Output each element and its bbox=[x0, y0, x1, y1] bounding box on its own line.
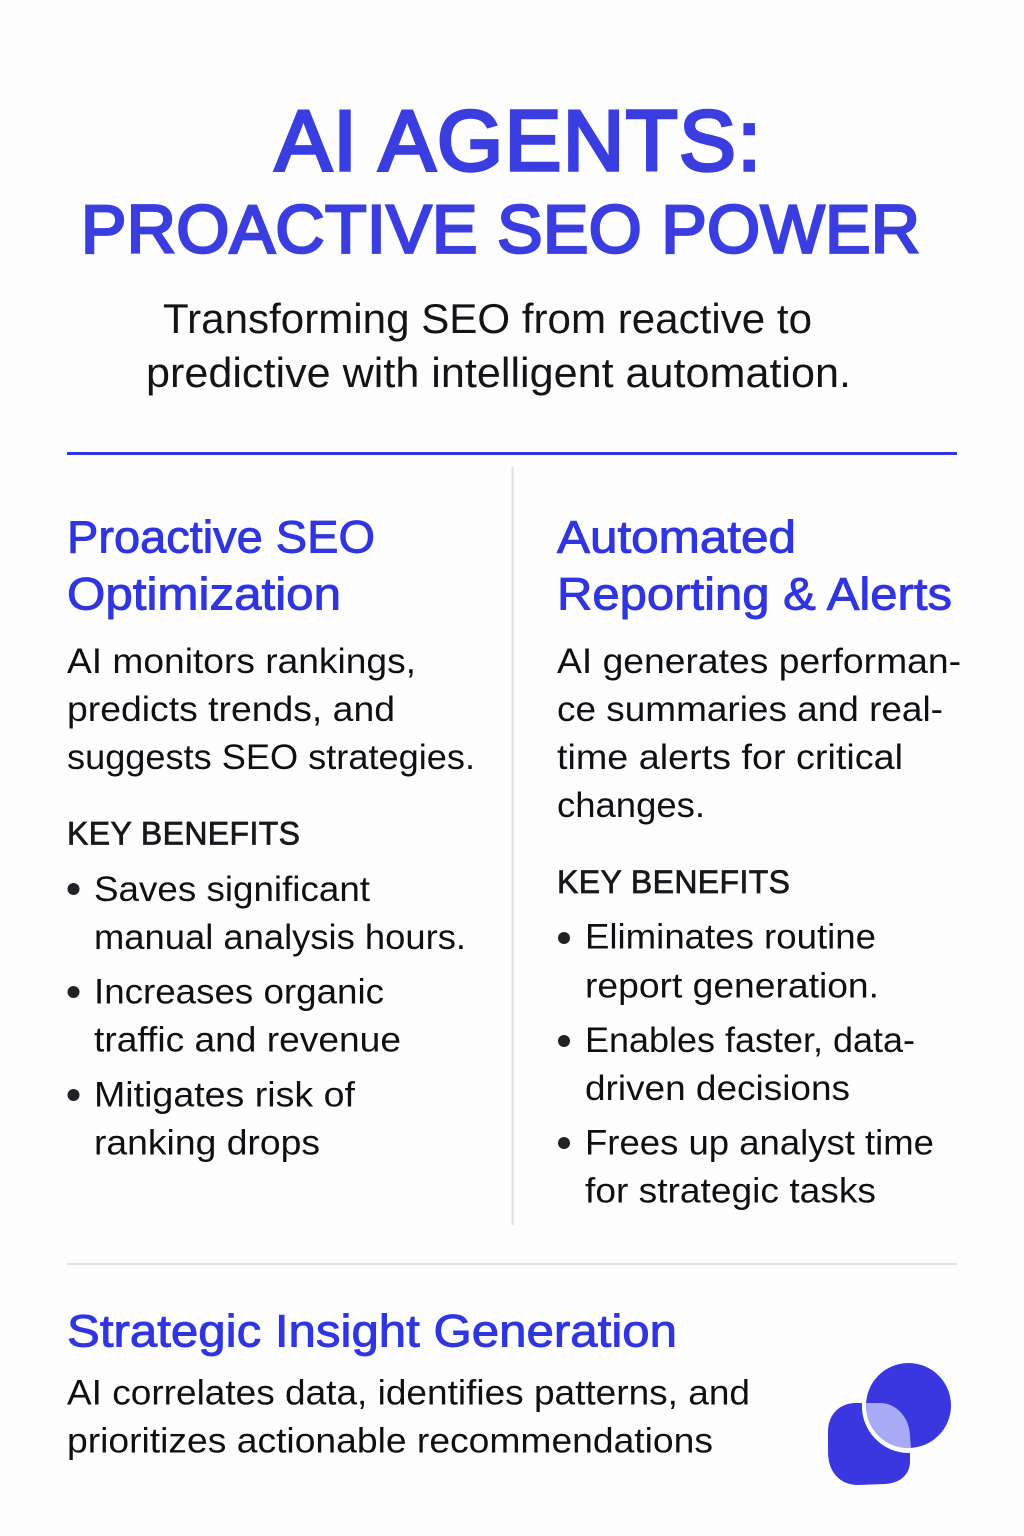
heading: strategic insight generation: Strategic Insight Generation bbox=[67, 1306, 677, 1356]
panel: strategic insight generation bbox=[67, 1306, 750, 1460]
heading: proactive seo optimization: Proactive SEO bbox=[67, 512, 375, 562]
benefits list: manual analysis hours. bbox=[94, 918, 466, 957]
benefits list: Enables faster, data- bbox=[585, 1021, 915, 1060]
description: changes. bbox=[557, 786, 705, 825]
benefits list: report generation. bbox=[585, 966, 879, 1006]
heading: automated reporting and alerts: Automated bbox=[557, 512, 796, 562]
description bbox=[557, 642, 961, 825]
heading: proactive seo optimization: Optimization bbox=[67, 568, 341, 620]
subtitle: predictive with intelligent automation. bbox=[146, 349, 851, 396]
title: AI AGENTS: bbox=[275, 94, 761, 189]
benefits list: for strategic tasks bbox=[585, 1172, 876, 1210]
benefits list: driven decisions bbox=[585, 1069, 850, 1108]
benefits list: ranking drops bbox=[94, 1124, 320, 1162]
benefits list: Saves significant bbox=[94, 870, 370, 909]
description: time alerts for critical bbox=[557, 738, 903, 777]
benefits list: Increases organic bbox=[94, 972, 384, 1012]
subtitle: Transforming SEO from reactive to bbox=[163, 295, 812, 342]
heading: proactive seo optimization bbox=[67, 512, 375, 620]
title: PROACTIVE SEO POWER bbox=[81, 192, 920, 268]
benefits list: traffic and revenue bbox=[94, 1020, 401, 1060]
heading: automated reporting and alerts: Reporting & Alerts bbox=[557, 568, 952, 620]
benefits list: Eliminates routine bbox=[585, 918, 876, 956]
key benefits heading: KEY BENEFITS bbox=[557, 864, 790, 900]
benefits list: Frees up analyst time bbox=[585, 1124, 934, 1162]
key benefits heading: KEY BENEFITS bbox=[67, 816, 300, 852]
heading: automated reporting and alerts bbox=[557, 512, 952, 620]
description: suggests SEO strategies. bbox=[67, 738, 475, 777]
panel: proactive seo optimization bbox=[67, 512, 475, 1162]
description: ce summaries and real- bbox=[557, 690, 943, 729]
benefits list: Mitigates risk of bbox=[94, 1076, 355, 1114]
description bbox=[67, 1374, 750, 1460]
benefits list bbox=[68, 870, 466, 1162]
panel: automated reporting and alerts bbox=[557, 512, 961, 1210]
subtitle bbox=[146, 295, 851, 396]
description: AI monitors rankings, bbox=[67, 642, 416, 681]
icon: overlapping circle and rounded square bbox=[828, 1363, 951, 1485]
description: prioritizes actionable recommendations bbox=[67, 1422, 713, 1460]
title bbox=[81, 94, 920, 268]
description: AI correlates data, identifies patterns, and bbox=[67, 1374, 750, 1412]
description bbox=[67, 642, 475, 777]
description: AI generates performan- bbox=[557, 642, 961, 681]
description: predicts trends, and bbox=[67, 690, 395, 729]
benefits list bbox=[558, 918, 934, 1210]
